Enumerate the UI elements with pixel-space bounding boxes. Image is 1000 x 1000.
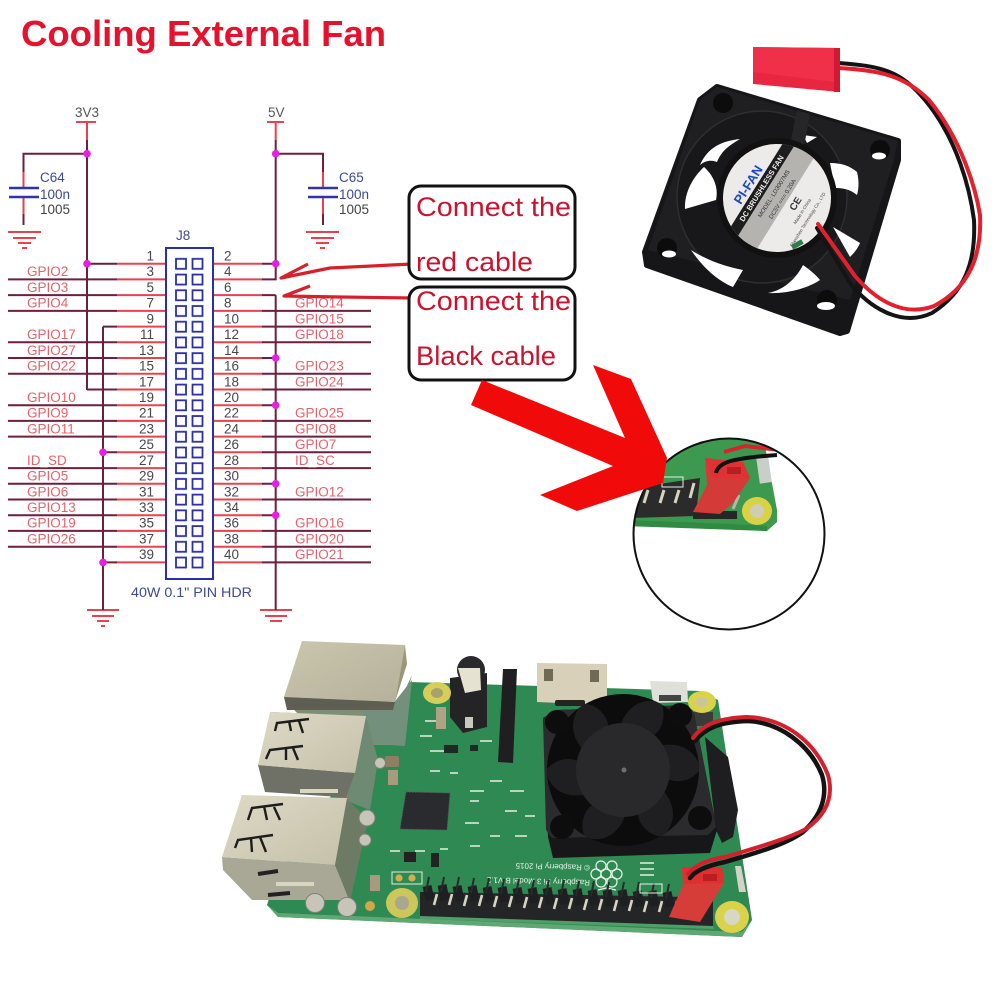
odd pin numbers: 33 bbox=[139, 500, 154, 515]
callout: connect the black cable bbox=[409, 286, 575, 380]
audio jack bbox=[450, 656, 487, 733]
left GPIO labels bbox=[27, 264, 76, 546]
right GPIO labels: GPIO20 bbox=[295, 532, 344, 546]
mounted fan blades bbox=[547, 701, 699, 839]
even pin numbers: 34 bbox=[224, 500, 240, 515]
arrow: red cable to pin 4 bbox=[281, 264, 412, 278]
component labels: 100n bbox=[40, 187, 70, 202]
fan strut bbox=[790, 110, 810, 147]
fan wire exit bbox=[791, 239, 804, 250]
left GPIO labels: GPIO9 bbox=[27, 406, 68, 421]
odd pin numbers: 3 bbox=[146, 264, 154, 279]
left GPIO labels: GPIO22 bbox=[27, 358, 76, 374]
odd pin numbers: 23 bbox=[139, 421, 154, 436]
mounted fan bbox=[543, 694, 717, 858]
board silkscreen text: Raspberry Pi 3 Model B V1.2 bbox=[486, 875, 590, 887]
even pin numbers: 14 bbox=[224, 343, 240, 358]
component labels: 3V3 bbox=[75, 105, 99, 120]
board silkscreen text: © Raspberry Pi 2015 bbox=[515, 861, 590, 872]
fan hub label: PI-FAN bbox=[731, 163, 766, 207]
even pin numbers: 20 bbox=[224, 390, 239, 405]
even pin numbers: 32 bbox=[224, 484, 239, 499]
component labels: 5V bbox=[268, 105, 285, 120]
odd pin numbers: 39 bbox=[139, 547, 154, 562]
right GPIO labels: GPIO23 bbox=[295, 358, 344, 374]
arrow: black cable to pin 6 bbox=[284, 286, 412, 298]
right GPIO labels: GPIO24 bbox=[295, 374, 344, 389]
even pin numbers: 36 bbox=[224, 516, 239, 531]
left GPIO labels: GPIO19 bbox=[27, 516, 76, 531]
callout: connect the red cable: red cable bbox=[416, 247, 533, 277]
left GPIO labels: GPIO11 bbox=[27, 421, 75, 436]
odd pin numbers: 27 bbox=[139, 453, 154, 468]
right GPIO labels: GPIO18 bbox=[295, 327, 344, 342]
junction dots bbox=[83, 150, 280, 566]
left GPIO labels: GPIO5 bbox=[27, 469, 68, 484]
mounted fan corner holes bbox=[545, 703, 712, 839]
left GPIO labels: GPIO26 bbox=[27, 532, 76, 546]
HDMI port bbox=[537, 663, 607, 706]
odd pin numbers: 35 bbox=[139, 516, 154, 531]
odd pin numbers: 19 bbox=[139, 390, 154, 405]
even pin numbers: 38 bbox=[224, 532, 239, 546]
left GPIO labels: GPIO17 bbox=[27, 327, 76, 342]
red plug bbox=[753, 47, 840, 92]
magnified board corner bbox=[634, 440, 778, 531]
even pin numbers: 40 bbox=[224, 547, 239, 562]
odd pin numbers: 21 bbox=[139, 406, 154, 421]
micro USB port bbox=[650, 681, 688, 703]
even pin numbers: 30 bbox=[224, 469, 239, 484]
solder lumps bbox=[306, 758, 386, 916]
J8 header bbox=[166, 248, 213, 579]
fan mounting holes bbox=[657, 93, 890, 310]
even pin numbers: 24 bbox=[224, 421, 240, 436]
right GPIO labels: GPIO12 bbox=[295, 484, 344, 499]
even pin numbers bbox=[224, 248, 240, 562]
odd pin numbers: 29 bbox=[139, 469, 154, 484]
PCB bbox=[267, 682, 752, 937]
odd pin numbers: 9 bbox=[146, 311, 154, 326]
even pin numbers: 22 bbox=[224, 406, 239, 421]
side ribbon connector bbox=[705, 737, 738, 843]
callout: connect the black cable: Black cable bbox=[416, 341, 556, 371]
fan hub label: DC BRUSHLESS FAN bbox=[738, 154, 786, 223]
component labels: 1005 bbox=[40, 202, 70, 217]
fan hub label: CE bbox=[788, 195, 805, 213]
even pin numbers: 12 bbox=[224, 327, 239, 342]
right GPIO labels bbox=[295, 296, 344, 562]
odd pin numbers: 7 bbox=[146, 296, 154, 311]
component labels bbox=[40, 105, 369, 600]
odd pin numbers: 37 bbox=[139, 532, 154, 546]
callout: connect the black cable: Connect the bbox=[416, 286, 571, 316]
Pi-Fan product photo bbox=[645, 47, 980, 333]
GPIO header bbox=[420, 877, 714, 929]
magnified connector circle bbox=[625, 430, 824, 630]
lower USB port bbox=[222, 795, 368, 902]
odd pin numbers: 31 bbox=[139, 484, 154, 499]
red header connector bbox=[669, 867, 724, 922]
even pin numbers: 18 bbox=[224, 374, 239, 389]
left GPIO labels: GPIO4 bbox=[27, 296, 69, 311]
odd pin numbers: 13 bbox=[139, 343, 154, 358]
even pin numbers: 4 bbox=[224, 264, 232, 279]
fan hub label: Shenzhen Technology Co., LTD bbox=[789, 191, 827, 248]
panel: GPIO schematic bbox=[8, 105, 371, 626]
white display connector bbox=[735, 866, 746, 892]
magnified wires bbox=[724, 446, 780, 452]
even pin numbers: 16 bbox=[224, 358, 239, 374]
callout: connect the red cable: Connect the bbox=[416, 192, 571, 222]
left GPIO labels: GPIO10 bbox=[27, 390, 76, 405]
mounted fan hub bbox=[576, 723, 670, 817]
even pin numbers: 10 bbox=[224, 311, 239, 326]
fan hub label: MODEL: LD3007MS bbox=[758, 169, 792, 219]
upper USB port bbox=[258, 712, 378, 810]
odd pin numbers: 5 bbox=[146, 280, 154, 295]
fan hub label bbox=[723, 144, 831, 252]
magnified header pins bbox=[630, 477, 739, 519]
magnified red connector bbox=[693, 458, 750, 514]
big red arrow bbox=[471, 365, 667, 511]
right GPIO labels: GPIO16 bbox=[295, 516, 344, 531]
magnified mounting hole bbox=[742, 497, 772, 525]
even pin numbers: 8 bbox=[224, 296, 232, 311]
board fan wires bbox=[688, 717, 830, 878]
component labels: 1005 bbox=[339, 202, 369, 217]
left GPIO labels: ID_SD bbox=[27, 453, 67, 468]
fan hub label: DC5V === 0.20A bbox=[769, 179, 798, 220]
callout: connect the red cable bbox=[409, 186, 575, 279]
right GPIO labels: GPIO15 bbox=[295, 311, 344, 326]
component labels: C64 bbox=[40, 170, 65, 185]
even pin numbers: 26 bbox=[224, 437, 239, 452]
odd pin numbers: 1 bbox=[146, 248, 154, 264]
Raspberry Pi board photo bbox=[222, 641, 830, 937]
right GPIO labels: GPIO25 bbox=[295, 406, 344, 421]
right GPIO labels: GPIO8 bbox=[295, 421, 336, 436]
raspberry logo bbox=[591, 861, 622, 890]
camera ribbon connector bbox=[498, 669, 517, 763]
RJ45 ethernet jack bbox=[284, 641, 412, 746]
odd pin numbers: 11 bbox=[140, 327, 154, 342]
odd pin numbers: 17 bbox=[139, 374, 154, 389]
component labels: C65 bbox=[339, 170, 364, 185]
right GPIO labels: GPIO21 bbox=[295, 547, 344, 562]
even pin numbers: 2 bbox=[224, 248, 232, 264]
right GPIO labels: GPIO14 bbox=[295, 296, 344, 311]
even pin numbers: 28 bbox=[224, 453, 239, 468]
processor chip bbox=[400, 792, 450, 830]
component labels: 100n bbox=[339, 187, 369, 202]
fan hub label: Made in China bbox=[792, 197, 812, 225]
even pin numbers: 6 bbox=[224, 280, 232, 295]
schematic wiring bbox=[8, 122, 371, 626]
left GPIO labels: GPIO13 bbox=[27, 500, 76, 515]
fan frame bbox=[645, 87, 898, 333]
left GPIO labels: GPIO6 bbox=[27, 484, 68, 499]
right GPIO labels: ID_SC bbox=[295, 453, 335, 468]
component labels: 40W 0.1" PIN HDR bbox=[131, 585, 252, 600]
odd pin numbers bbox=[139, 248, 154, 562]
board silkscreen text bbox=[486, 861, 590, 887]
odd pin numbers: 25 bbox=[139, 437, 154, 452]
circuit texture bbox=[390, 720, 654, 876]
fan hub bbox=[717, 138, 837, 258]
fan air gaps bbox=[685, 135, 860, 293]
left GPIO labels: GPIO3 bbox=[27, 280, 68, 295]
fan wires bbox=[817, 63, 980, 318]
board components bbox=[365, 695, 713, 911]
mounting holes bbox=[386, 682, 749, 933]
right GPIO labels: GPIO7 bbox=[295, 437, 336, 452]
left GPIO labels: GPIO27 bbox=[27, 343, 76, 358]
odd pin numbers: 15 bbox=[139, 358, 154, 374]
title: Cooling External Fan bbox=[21, 13, 386, 54]
left GPIO labels: GPIO2 bbox=[27, 264, 68, 279]
component labels: J8 bbox=[176, 228, 190, 243]
